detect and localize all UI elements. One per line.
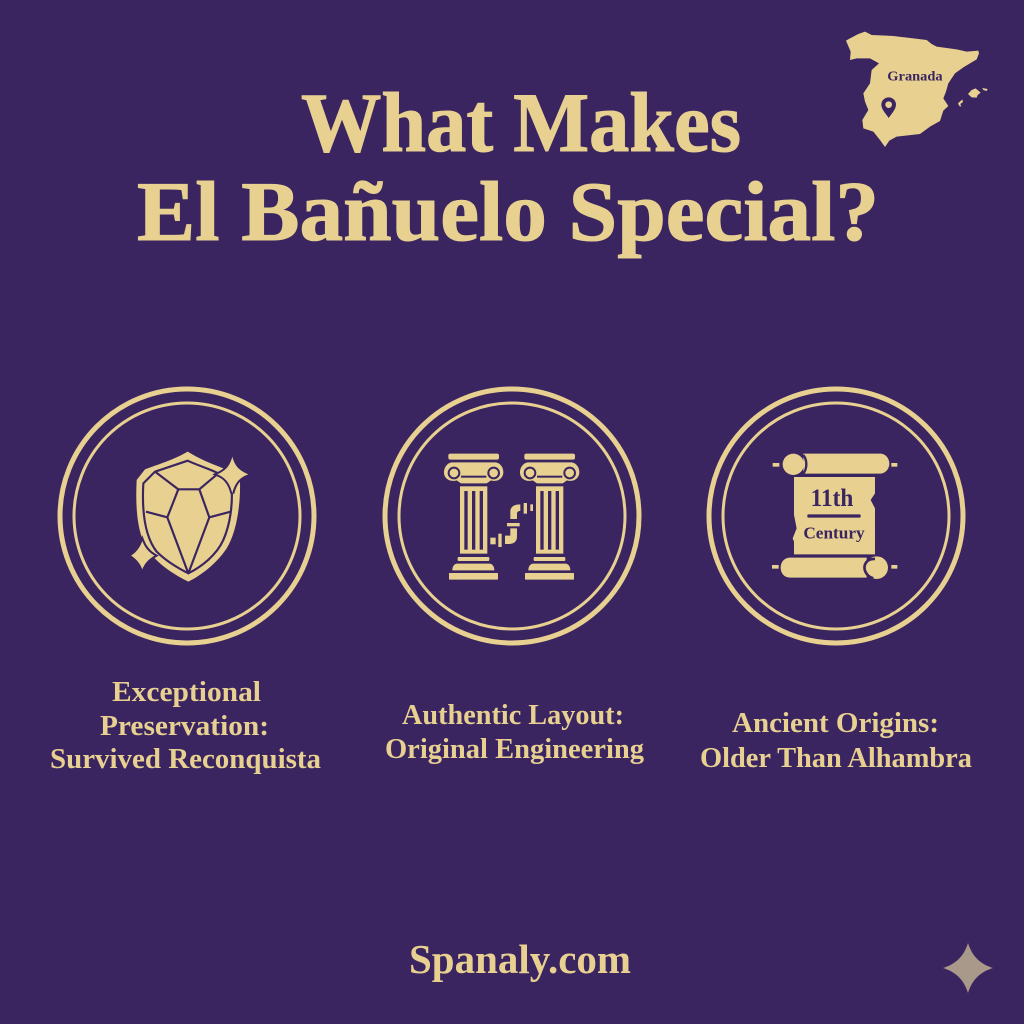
label: exceptional preservation: Exceptional [112,676,261,708]
title [137,76,879,259]
panel: ancient origins [700,389,972,774]
map of Spain with Granada marker [846,32,988,147]
icon: columns and pipe [444,454,579,580]
icon: gem shield with sparkles [131,452,248,582]
panel: exceptional preservation [50,389,321,775]
icon: corner sparkle [943,943,993,993]
icon: scroll reading 11th century [772,454,897,579]
badge rings [60,389,314,643]
title: El Bañuelo Special? [137,165,879,259]
label: authentic layout: Original Engineering [385,733,644,765]
badge rings [385,389,639,643]
label: ancient origins: Older Than Alhambra [700,742,972,774]
label: exceptional preservation: Survived Reconquista [50,743,321,775]
label: exceptional preservation: Preservation: [100,710,269,742]
panel: authentic layout [385,389,644,765]
title: What Makes [301,76,741,170]
label: authentic layout: Authentic Layout: [402,699,624,731]
label: authentic layout [385,699,644,765]
map of Spain with Granada marker: Granada [887,69,943,84]
icon: scroll reading 11th century: Century [803,523,865,542]
icon: scroll reading 11th century: 11th [811,484,853,512]
label: ancient origins: Ancient Origins: [732,707,939,739]
label: ancient origins [700,707,972,774]
footer brand: Spanaly.com [409,936,631,982]
badge rings [709,389,963,643]
label: exceptional preservation [50,676,321,775]
